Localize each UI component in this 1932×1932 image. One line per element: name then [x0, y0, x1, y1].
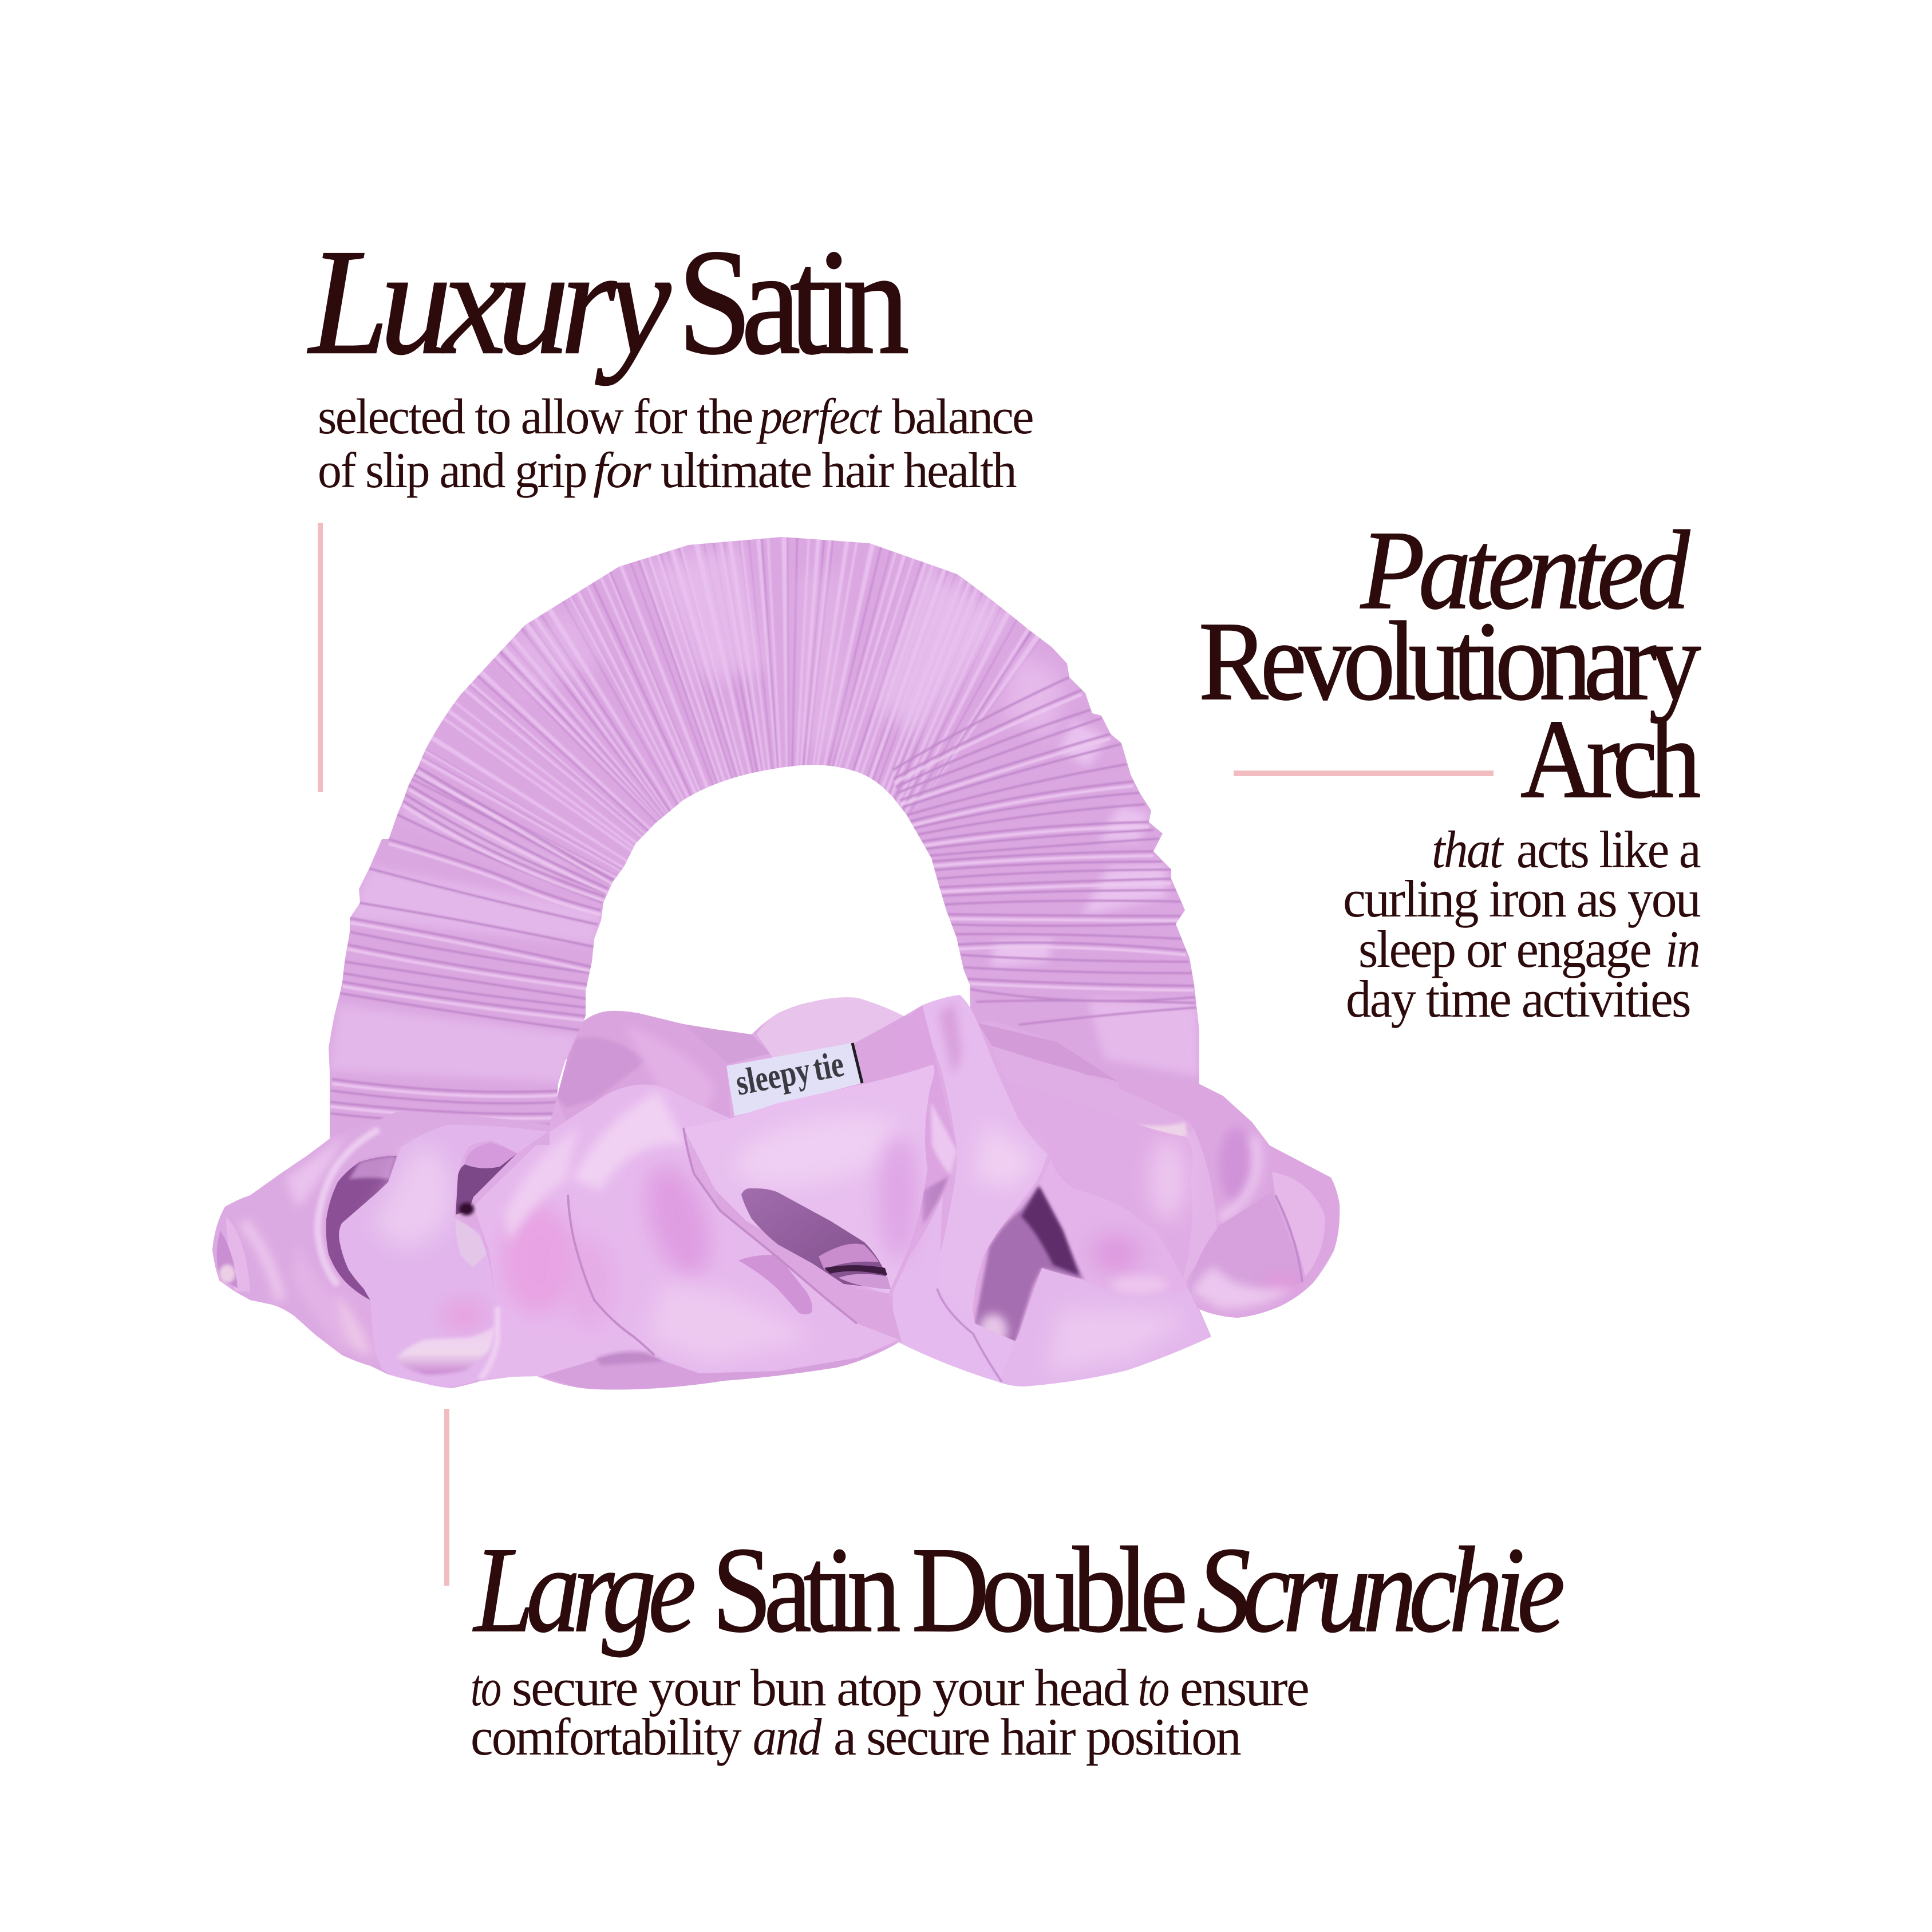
central fold seams [568, 1128, 857, 1355]
text block: luxury satin description: balance [892, 389, 1033, 445]
pale strip left of hollow [893, 1195, 1016, 1382]
arch crown pleats [515, 663, 981, 832]
bottom hem [542, 1342, 899, 1394]
text block: arch description: that [1432, 820, 1504, 879]
heading: Patented Revolutionary Arch: Patented [1360, 507, 1690, 633]
text block: luxury satin description: for [593, 443, 652, 499]
left loop rim [318, 1129, 379, 1285]
heading: Large Satin Double Scrunchie: Satin Double [712, 1522, 1184, 1658]
text block: scrunchie description: to [471, 1658, 501, 1717]
text block: arch description [1343, 820, 1701, 1028]
central front panel [683, 1065, 934, 1294]
text block: luxury satin description: selected to allow for the [318, 389, 753, 445]
product: satin heatless curling arch [321, 527, 1214, 1145]
text block: scrunchie description: ensure [1180, 1658, 1308, 1717]
middle lower fold with pink glow [1039, 1160, 1188, 1298]
right loop panel [1188, 1192, 1302, 1301]
dark hollow right [975, 1186, 1083, 1350]
fold between central panel and right fold [893, 1005, 957, 1219]
text block: scrunchie description [471, 1658, 1308, 1766]
heading: Large Satin Double Scrunchie: Large [472, 1522, 694, 1658]
dark hollow centre-left [456, 1153, 517, 1215]
product: large satin double scrunchie [206, 990, 1351, 1397]
text block: luxury satin description [318, 389, 1033, 499]
left front blade [339, 1125, 548, 1388]
glossy lower sheen [397, 1326, 495, 1374]
panel: luxury satin callout [307, 219, 1033, 792]
small slit pocket [738, 1255, 812, 1314]
text block: arch description: acts like a [1516, 820, 1701, 879]
central large fold [473, 1084, 899, 1381]
pointer line: scrunchie [444, 1409, 449, 1586]
heading: Patented Revolutionary Arch [1199, 507, 1701, 821]
hole in central panel [741, 1188, 891, 1289]
left mid panel [225, 1112, 550, 1377]
text block: scrunchie description: and [753, 1708, 822, 1766]
text block: luxury satin description: perfect [756, 389, 883, 445]
text block: scrunchie description: a secure hair position [833, 1708, 1241, 1766]
heading: Luxury Satin: Luxury [307, 219, 672, 386]
text block: scrunchie description: comfortability [471, 1708, 742, 1766]
heading: Patented Revolutionary Arch: Revolutionary [1199, 598, 1701, 724]
right loop pocket [1272, 1172, 1325, 1277]
heading: Large Satin Double Scrunchie: Scrunchie [1196, 1522, 1563, 1658]
text block: arch description: day time activities [1346, 970, 1690, 1028]
text block: arch description: in [1665, 920, 1699, 978]
text block: scrunchie description: to [1138, 1658, 1169, 1717]
middle upper fold [1007, 1081, 1192, 1282]
text block: luxury satin description: ultimate hair health [661, 443, 1017, 499]
text block: luxury satin description: of slip and grip [318, 443, 586, 499]
back fold pale [757, 997, 904, 1065]
panel: patented arch callout [1199, 507, 1701, 1028]
heading: Luxury Satin: Satin [678, 219, 910, 386]
brand tag [726, 1043, 862, 1116]
right leg pleats [893, 677, 1196, 1025]
right leg smooth bands [990, 720, 1199, 1076]
left rosette [212, 1207, 283, 1300]
left leg smooth bands [329, 799, 601, 1082]
front lower right fold [998, 1268, 1211, 1386]
fabric behind tag [852, 1016, 939, 1088]
right big body [1118, 1080, 1340, 1318]
back rolled folds [978, 1023, 1118, 1081]
text block: arch description: curling iron as you [1343, 870, 1701, 928]
pleat highlights [330, 694, 1194, 1119]
left leg pleats [330, 767, 613, 1125]
right upper pale fold [922, 995, 1048, 1318]
heading: Large Satin Double Scrunchie [472, 1522, 1563, 1658]
left loop hollow [326, 1156, 397, 1300]
satin sheen patches on arch crown [504, 547, 1063, 750]
text block: arch description: sleep or engage [1358, 920, 1650, 978]
text block: scrunchie description: secure your bun atop your head [512, 1658, 1129, 1717]
heading: Patented Revolutionary Arch: Arch [1520, 696, 1700, 821]
lower rim below hole [715, 1190, 902, 1342]
pointer line: luxury satin [318, 523, 323, 792]
heading: Luxury Satin [307, 219, 910, 386]
brand tag: sleepy tie [733, 1043, 847, 1103]
panel: scrunchie callout [444, 1409, 1563, 1766]
pointer line: arch [1234, 771, 1494, 776]
back fold left [557, 1011, 770, 1139]
